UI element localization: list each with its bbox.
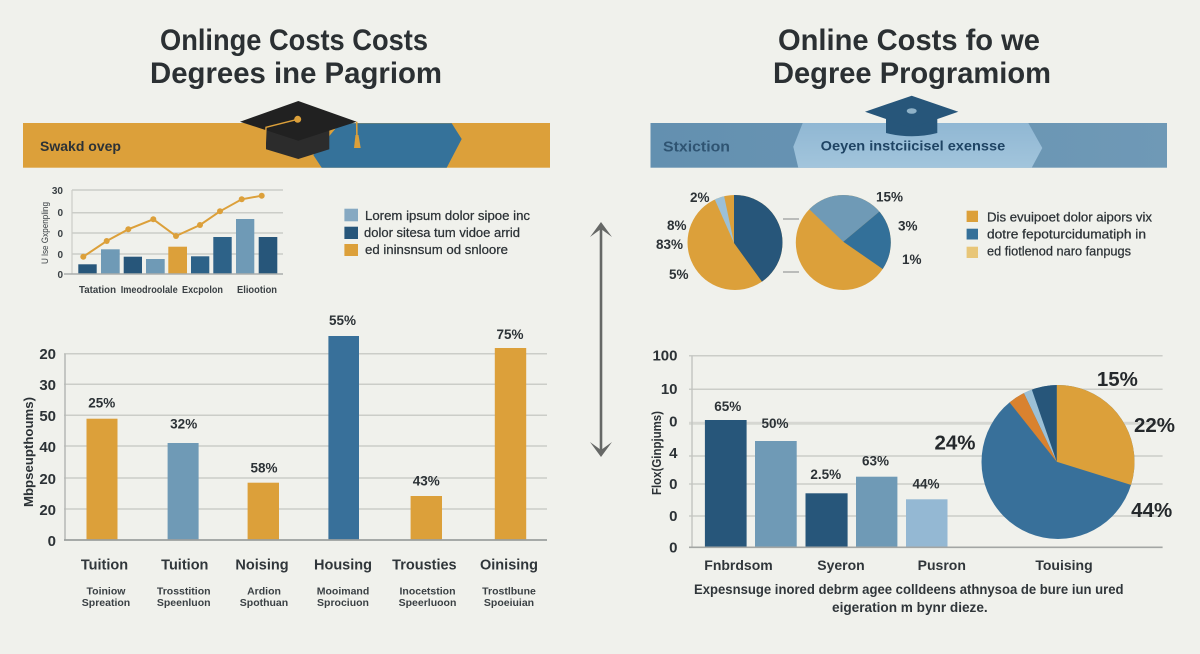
bar chart: left large: Sprociuon: [317, 597, 369, 609]
bar chart: right large: 4: [669, 445, 678, 462]
title: left: Degrees ine Pagriom: [150, 57, 442, 90]
bar chart: right large: 0: [669, 414, 678, 430]
bar chart: right large: 50%: [761, 416, 789, 431]
bar chart: left large: 20: [39, 346, 56, 363]
bar chart: left large: Speenluon: [157, 597, 211, 609]
legend: left: [344, 208, 531, 257]
legend: left: Lorem ipsum dolor sipoe inc: [365, 208, 531, 223]
bar chart: right large: Fnbrdsom: [704, 557, 773, 573]
small combo chart: 0: [57, 250, 63, 261]
bar chart: left large: Mooimand: [317, 585, 369, 597]
small combo chart: 0: [57, 270, 63, 281]
bar chart: left large: Inocetstion: [399, 585, 456, 597]
bar chart: right large: Touising: [1035, 557, 1093, 573]
pie chart: second small: [796, 192, 922, 290]
icon: graduation cap blue: [865, 96, 958, 136]
small combo chart: Imeodroolale: [121, 285, 178, 296]
bar chart: left large: 20: [39, 502, 56, 519]
bar chart: right large: 65%: [714, 399, 741, 414]
bar chart: left large: Spoeiuian: [484, 597, 534, 609]
bar chart: left large: Tuition: [81, 558, 128, 574]
bar chart: left large: 58%: [250, 461, 278, 476]
bar chart: left large: Oinising: [480, 558, 538, 574]
pie chart: large: 15%: [1097, 368, 1138, 391]
pie chart: first small: 5%: [669, 267, 689, 282]
bar chart: right large: 2.5%: [810, 467, 841, 482]
small combo chart: U lse Gxpenpling: [40, 202, 51, 264]
small combo chart: Excpolon: [182, 285, 223, 296]
title: right: Degree Programiom: [773, 57, 1051, 90]
arrow: vertical double-headed: [590, 222, 612, 457]
pie chart: second small: 1%: [902, 252, 922, 267]
pie chart: first small: 2%: [690, 190, 710, 205]
bar chart: left large: Spothuan: [240, 597, 288, 609]
pie chart: large: 44%: [1131, 499, 1172, 522]
title: right: [773, 24, 1051, 90]
small combo chart: 0: [57, 229, 63, 240]
small combo chart: Eliootion: [237, 285, 277, 296]
bar chart: left large: 50: [39, 408, 56, 425]
banner: right: Oeyen instciicisel exensse: [821, 138, 1005, 154]
bar chart: left large: Trousties: [392, 558, 457, 574]
bar chart: left large: Trostlbune: [482, 585, 536, 597]
bar chart: left large: 25%: [88, 396, 115, 411]
legend: left: dolor sitesa tum vidoe arrid: [364, 225, 520, 240]
bar chart: left large: Toiniow: [87, 585, 126, 597]
bar chart: right large: 44%: [912, 477, 940, 492]
bar chart: right large: 10: [661, 381, 678, 398]
bar chart: left large: 55%: [329, 313, 356, 328]
bar chart: left large: 43%: [413, 474, 440, 489]
bar chart: right large: 63%: [862, 454, 889, 469]
legend: right: [967, 210, 1153, 259]
bar chart: left large: 32%: [170, 417, 197, 432]
small combo chart: Tatation: [79, 285, 116, 296]
bar chart: left large: [22, 313, 547, 609]
banner: right: Stxiction: [663, 138, 730, 156]
banner: left: [23, 123, 550, 168]
bar chart: left large: Noising: [235, 558, 289, 574]
bar chart: right large: Flox(Ginpjums): [650, 411, 664, 495]
bar chart: left large: 0: [48, 533, 56, 550]
bar chart: right large: 0: [669, 508, 678, 525]
title: right: Online Costs fo we: [778, 24, 1040, 57]
bar chart: left large: Spreation: [82, 597, 130, 609]
bar chart: left large: Mbpseupthoums): [22, 397, 36, 507]
bar chart: left large: 20: [39, 471, 56, 488]
caption: eigeration m bynr dieze.: [832, 599, 988, 615]
bar chart: left large: 75%: [496, 327, 524, 342]
bar chart: left large: Housing: [314, 558, 372, 574]
bar chart: right large: 100: [652, 348, 678, 364]
bar chart: left large: Ardion: [247, 585, 281, 597]
bar chart: left large: 40: [39, 439, 56, 456]
pie chart: second small: 15%: [876, 190, 903, 205]
bar chart: right large: [650, 348, 1163, 573]
small combo chart: 0: [57, 208, 63, 219]
bar chart: right large: Pusron: [918, 557, 966, 573]
banner: right: [650, 123, 1167, 168]
title: left: Onlinge Costs Costs: [160, 24, 428, 57]
icon: graduation cap black: [240, 101, 361, 159]
panel: left column: [22, 24, 550, 609]
bar chart: left large: Tuition: [161, 558, 208, 574]
small combo chart: [40, 186, 283, 296]
small combo chart: 30: [52, 186, 63, 197]
pie chart: second small: 3%: [898, 219, 918, 234]
panel: right column: [650, 24, 1175, 615]
pie chart: large: 24%: [934, 432, 976, 454]
pie chart: first small: 83%: [656, 237, 683, 252]
legend: right: Dis evuipoet dolor aipors vix: [987, 210, 1153, 225]
bar chart: right large: 0: [669, 540, 678, 556]
legend: right: dotre fepoturcidumatiph in: [987, 227, 1146, 242]
banner: left: Swakd ovep: [40, 138, 121, 154]
bar chart: left large: 30: [39, 377, 56, 394]
caption: [694, 581, 1124, 615]
title: left: [150, 24, 442, 90]
connector lines between pies: [783, 219, 799, 272]
bar chart: right large: Syeron: [817, 557, 865, 573]
bar chart: left large: Trosstition: [157, 585, 211, 597]
caption: Expesnsuge inored debrm agee colldeens athnysoa de bure iun ured: [694, 581, 1124, 597]
bar chart: right large: 0: [669, 476, 678, 493]
pie chart: large: [934, 360, 1175, 539]
pie chart: first small: 8%: [667, 218, 687, 233]
pie chart: first small: [656, 192, 782, 290]
pie chart: large: 22%: [1134, 414, 1175, 437]
bar chart: left large: Speerluoon: [399, 597, 456, 609]
legend: left: ed ininsnsum od snloore: [365, 242, 508, 257]
legend: right: ed fiotlenod naro fanpugs: [987, 244, 1131, 259]
